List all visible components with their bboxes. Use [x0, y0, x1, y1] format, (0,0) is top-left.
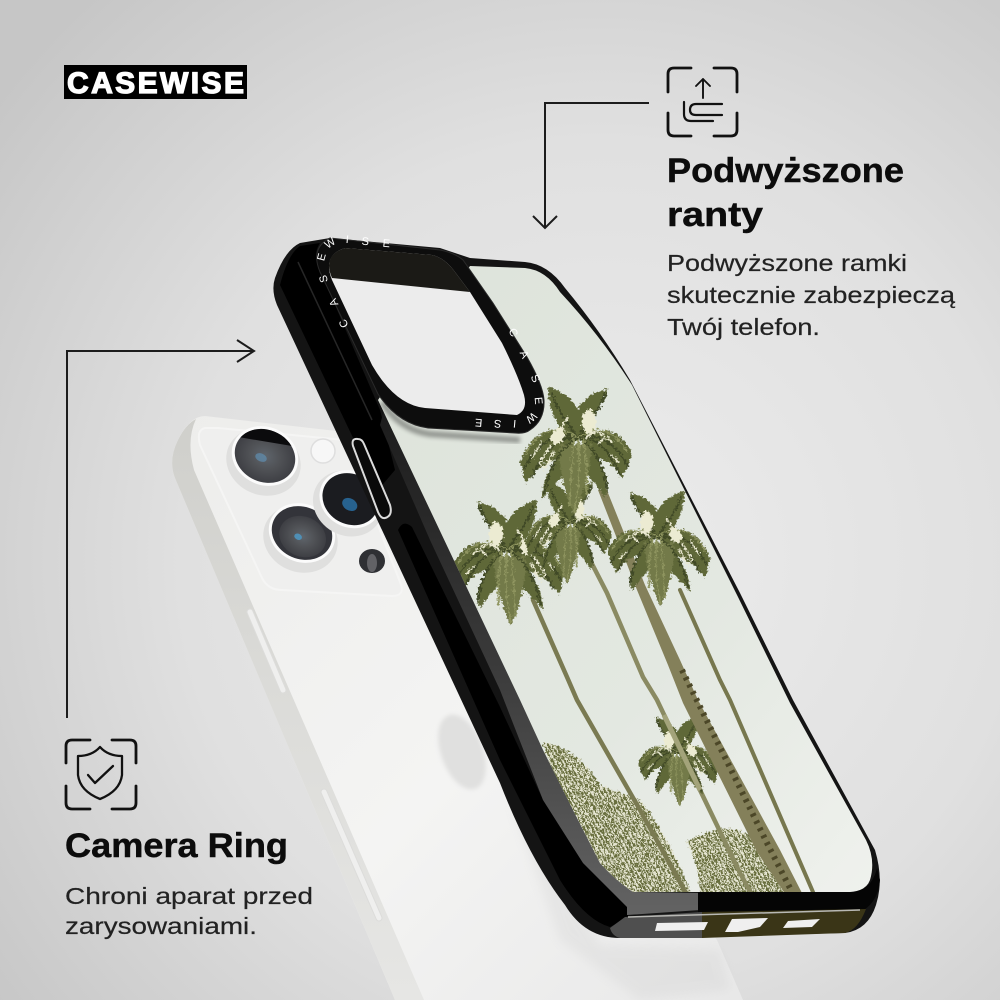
text: raised edges description: Twój telefon.: [667, 314, 820, 340]
text: camera ring description: zarysowaniami.: [65, 913, 257, 939]
side button: [353, 439, 391, 518]
side buttons: [250, 612, 379, 918]
ring lettering: C: [506, 327, 520, 339]
text: raised edges description: [667, 250, 956, 340]
logo: CASEWISE: CASEWISE: [67, 67, 244, 100]
arrow: to raised edges: [533, 103, 649, 228]
port openings: [655, 918, 820, 932]
side slot: [398, 524, 628, 927]
icon: raised edges: [668, 68, 737, 136]
side edge highlight: [298, 262, 372, 420]
text: camera ring description: [65, 883, 313, 939]
white phone: [172, 414, 743, 1000]
ring lettering: W: [323, 235, 338, 251]
camera plateau: [199, 428, 402, 596]
bright trunk over mid crown: [664, 715, 700, 790]
palm crown: right: [607, 491, 710, 607]
print background: [370, 255, 890, 905]
ring lettering: E: [382, 238, 390, 250]
text: raised edges description: skutecznie zabezpieczą: [667, 282, 956, 308]
glossy band beside screen: [380, 410, 700, 915]
ring lettering: S: [361, 236, 369, 248]
apple logo ghost: [429, 708, 495, 796]
bottom strip: [698, 868, 880, 915]
palm crown: left: [453, 500, 565, 626]
ring lettering: A: [327, 296, 341, 308]
flash: [311, 439, 335, 463]
heading: Camera Ring: Camera Ring: [65, 827, 288, 865]
heading: Podwyższone ranty: [667, 152, 904, 234]
heading: Podwyższone ranty: Podwyższone: [667, 152, 904, 190]
phone body: [172, 416, 743, 1000]
arrow: to camera ring: [67, 340, 254, 718]
text: camera ring description: Chroni aparat przed: [65, 883, 313, 909]
ring lettering: E: [475, 416, 483, 428]
ring lettering: S: [494, 417, 502, 429]
bottom highlight line: [628, 910, 860, 917]
thick trunk: [598, 488, 803, 895]
ring lettering: [315, 234, 544, 429]
lidar sensor: [359, 549, 385, 573]
ring lettering: A: [517, 349, 531, 361]
ring lettering: E: [532, 397, 544, 405]
palm trunks: [533, 560, 813, 895]
screen with palm print: [370, 255, 890, 905]
ring lettering: I: [513, 417, 517, 429]
ring lettering: C: [337, 317, 351, 329]
lens 1: [215, 414, 312, 507]
black case: [273, 238, 890, 938]
heading: Podwyższone ranty: ranty: [667, 196, 763, 234]
phone side band: [172, 419, 424, 1000]
ring lettering: I: [345, 234, 349, 246]
upper shell black sheen: [280, 243, 395, 490]
palm crown: center: [525, 481, 612, 584]
lens 2: [252, 491, 349, 584]
ring opening: [329, 248, 525, 415]
ring lettering: E: [315, 252, 329, 262]
camera ring: [315, 234, 544, 433]
lower right palm: [686, 829, 786, 895]
ring shadow on screen: [382, 402, 520, 440]
lens 3: [301, 457, 396, 549]
ring lettering: S: [317, 274, 331, 284]
ring lettering: S: [528, 373, 542, 385]
case shell: [273, 238, 880, 938]
palm crown: top: [520, 387, 632, 516]
mid palm crown: [638, 716, 719, 807]
soft case shadow on phone: [510, 800, 730, 1000]
ring body: [317, 238, 544, 433]
large lower left palm: [543, 743, 692, 895]
text: raised edges description: Podwyższone ramki: [667, 250, 907, 276]
bottom face left: [610, 912, 702, 938]
ring inner wall: [329, 248, 470, 292]
bottom face right: [702, 909, 866, 938]
ring lettering: W: [523, 409, 539, 426]
icon: shield with check: [66, 740, 136, 809]
